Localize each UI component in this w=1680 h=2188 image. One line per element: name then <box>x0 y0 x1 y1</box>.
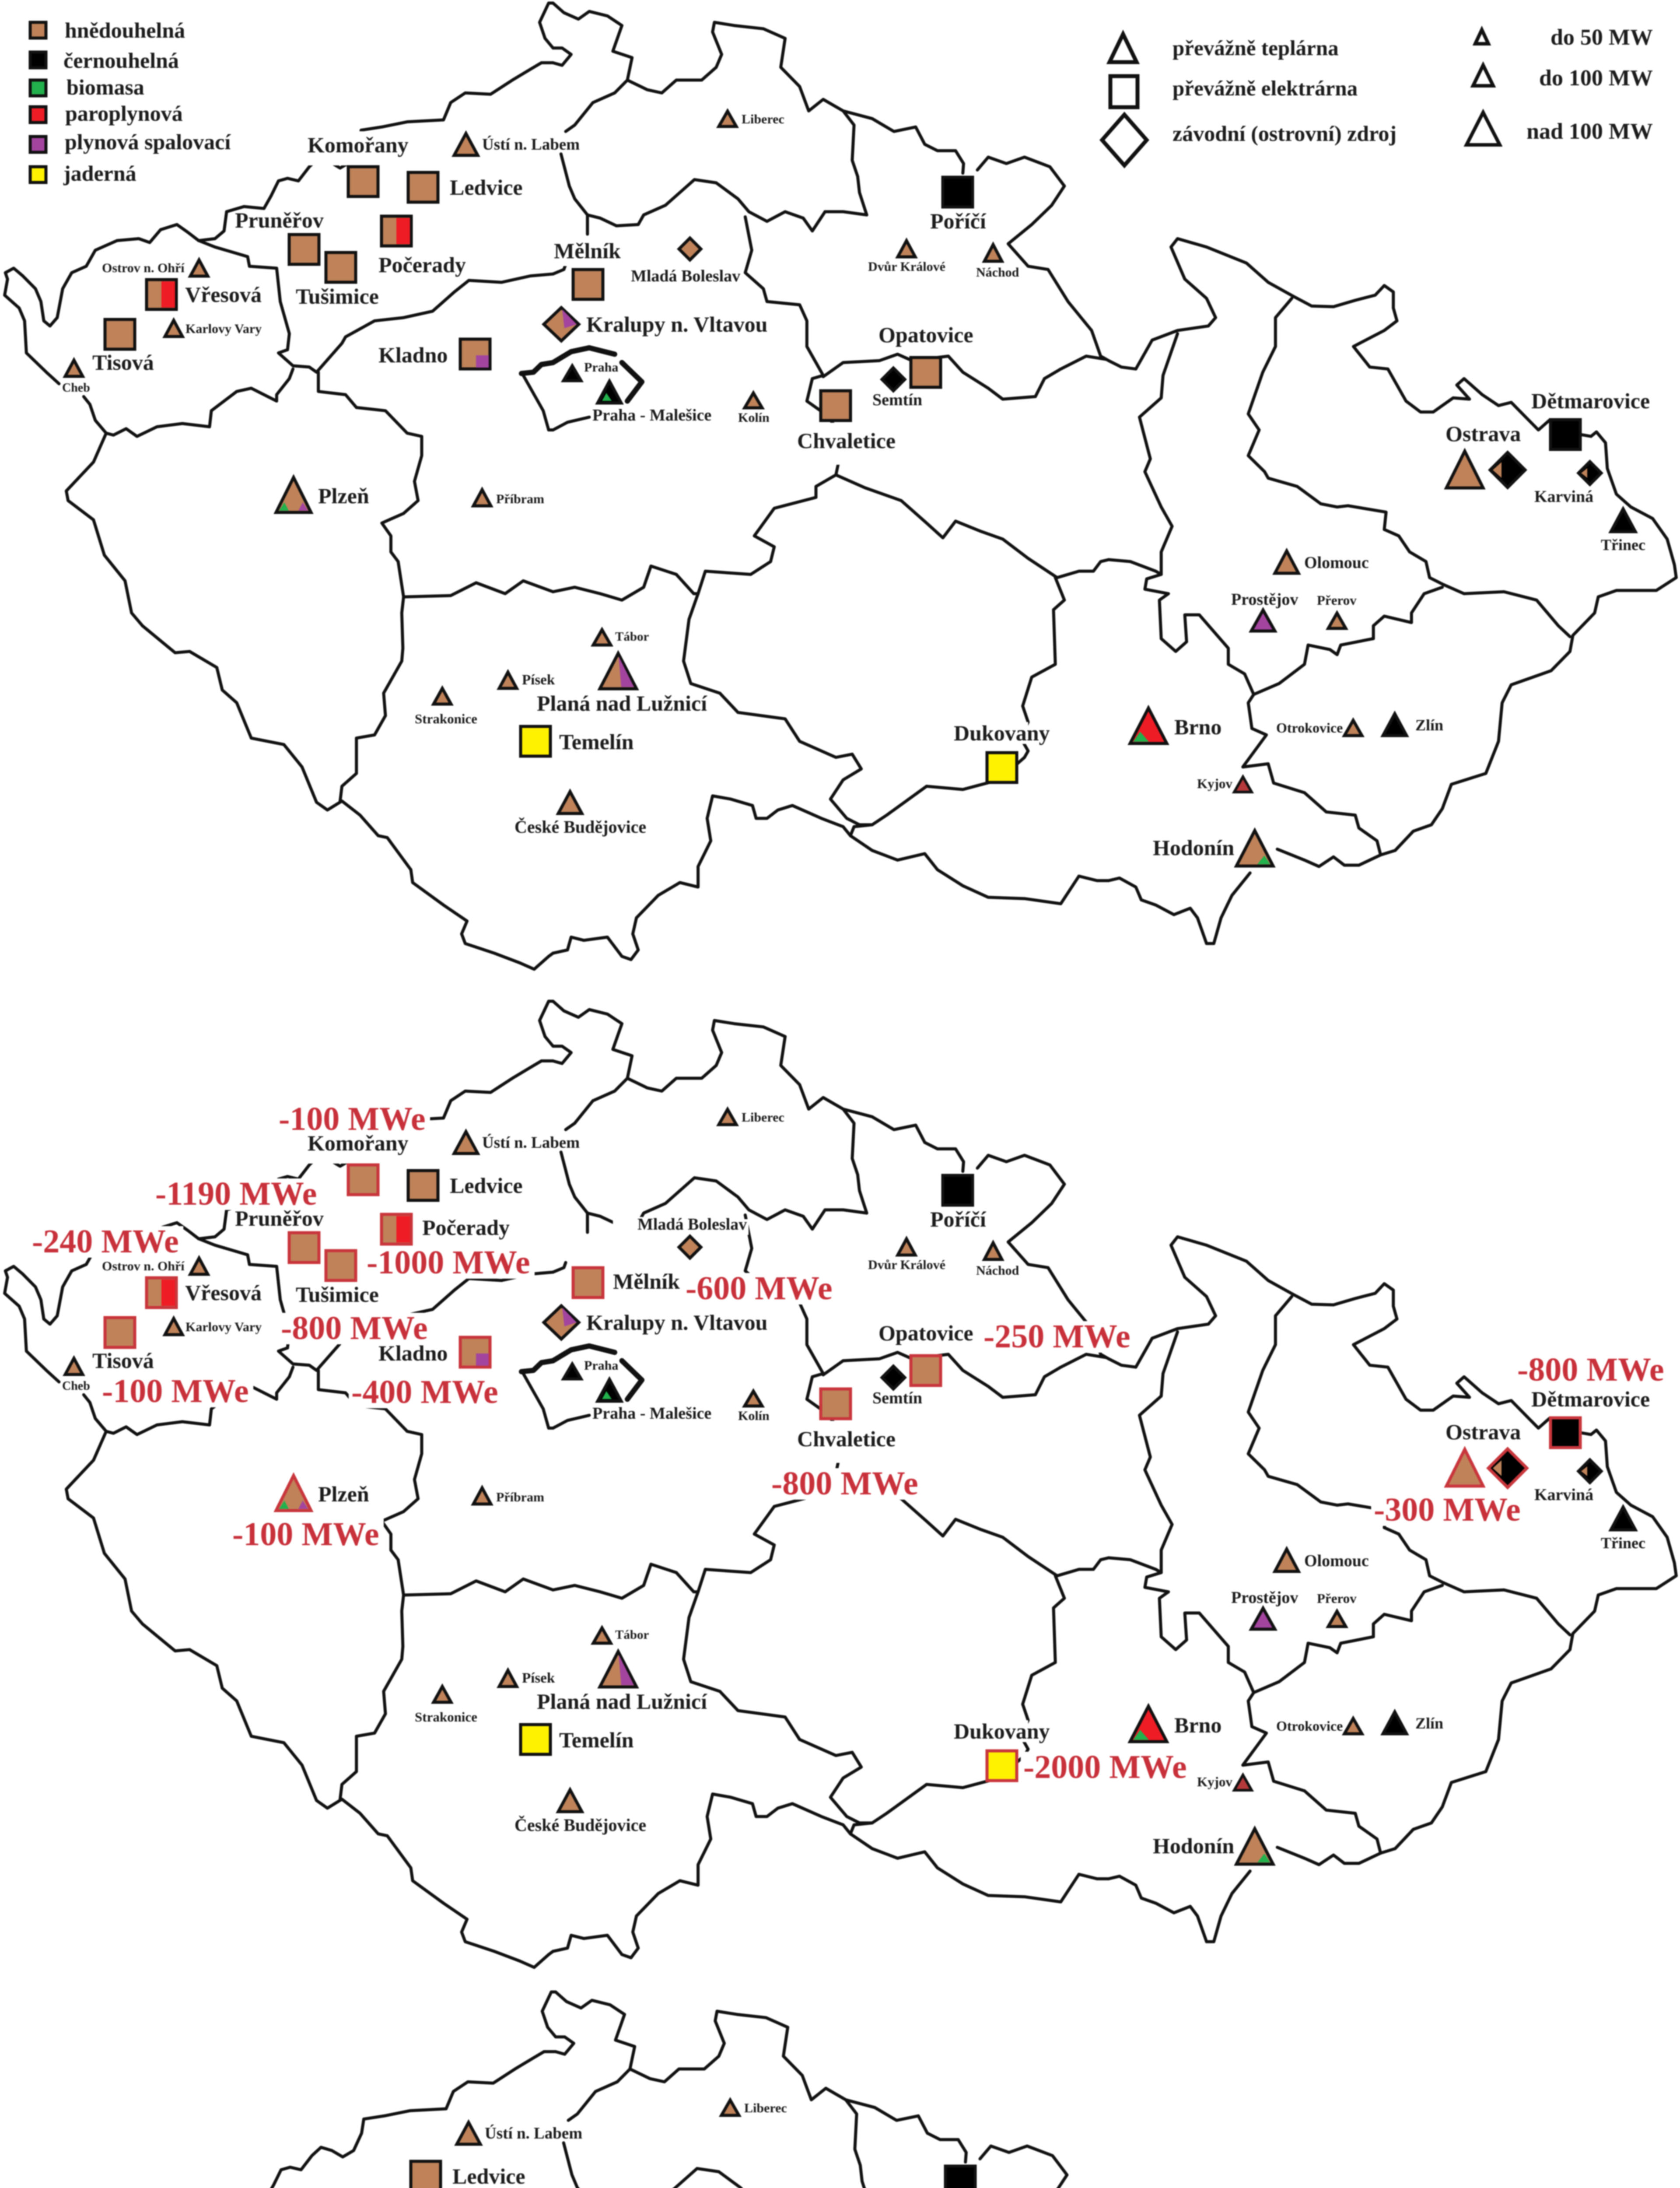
plant: Prostějov <box>1231 590 1298 631</box>
plant: Semtín <box>872 368 922 409</box>
plant: Ledvice: Ledvice <box>452 2164 525 2188</box>
plant: Mladá Boleslav: Mladá Boleslav <box>637 1215 747 1234</box>
plant: Třinec: Třinec <box>1601 536 1645 554</box>
plant: Chvaletice <box>797 391 896 453</box>
plant: Praha <box>564 360 618 381</box>
plant: Písek <box>499 1670 555 1687</box>
plant: Dukovany: Dukovany <box>954 721 1050 745</box>
plant: Dvůr Králové <box>868 241 945 274</box>
plant: Plzeň <box>276 477 369 512</box>
plant: Ledvice <box>408 172 523 202</box>
plant: Ledvice <box>408 1171 523 1200</box>
plant: Opatovice with reduction <box>878 1318 1130 1385</box>
plant: Třinec: Třinec <box>1601 1534 1645 1552</box>
plant: Příbram: Příbram <box>496 492 544 506</box>
plant: Strakonice: Strakonice <box>415 1709 477 1725</box>
plant: České Budějovice <box>514 1790 646 1835</box>
plant: Hodonín <box>1153 831 1273 866</box>
legend: fuel types: černouhelná <box>63 48 179 73</box>
plant: Pruněřov: Pruněřov <box>235 208 324 232</box>
plant: Komořany with reduction: Komořany <box>308 1131 409 1155</box>
plant: Praha - Malešice <box>592 1379 711 1423</box>
plant: Plzeň with reduction: Plzeň <box>318 1482 369 1506</box>
plant: České Budějovice: České Budějovice <box>514 817 646 837</box>
plant: Kladno <box>378 339 490 369</box>
plant: Vřesová with reduction: -240 MWe <box>32 1223 179 1260</box>
plant: Dětmarovice <box>1531 389 1650 449</box>
plant: Příbram: Příbram <box>496 1490 544 1504</box>
plant: Náchod: Náchod <box>976 265 1019 280</box>
plant: Opatovice <box>878 323 973 387</box>
plant: Cheb <box>62 1358 90 1393</box>
legend: fuel types: biomasa <box>66 75 144 99</box>
plant: Chvaletice with reduction <box>771 1389 918 1502</box>
plant: Kralupy n. Vltavou <box>544 308 767 341</box>
plant: Kolín: Kolín <box>738 410 770 425</box>
plant: Příbram <box>473 490 544 506</box>
plant: Dvůr Králové <box>868 1239 945 1272</box>
plant: Praha: Praha <box>584 360 618 375</box>
map outline: regions of Czechia <box>5 3 1676 969</box>
plant: Temelín: Temelín <box>559 729 634 754</box>
plant: Zlín: Zlín <box>1415 716 1443 734</box>
plant: Tušimice: Tušimice <box>296 284 379 309</box>
plant: Kladno with reduction: Kladno <box>378 1341 448 1365</box>
plant: Praha - Malešice: Praha - Malešice <box>592 1404 711 1423</box>
plant: Otrokovice: Otrokovice <box>1276 1718 1343 1734</box>
plant: Temelín <box>521 726 634 756</box>
plant: Ústí n. Labem: Ústí n. Labem <box>482 135 580 154</box>
legend: fuel types: jaderná <box>63 161 136 186</box>
plant: České Budějovice <box>514 792 646 837</box>
plant: Tušimice with reduction: -800 MWe <box>281 1310 428 1346</box>
plant: Ústí n. Labem: Ústí n. Labem <box>485 2124 582 2142</box>
plant: Náchod <box>976 245 1019 280</box>
legend: plant types: převážně teplárna <box>1172 36 1339 60</box>
plant: Liberec <box>719 1109 784 1125</box>
plant: Pruněřov with reduction <box>155 1175 324 1262</box>
plant: Praha <box>564 1358 618 1379</box>
legend: plant types <box>1102 34 1396 165</box>
plant: Olomouc: Olomouc <box>1304 1552 1369 1570</box>
plant: Karviná <box>1534 1460 1601 1504</box>
plant: Ledvice: Ledvice <box>450 1173 523 1198</box>
plant: Dvůr Králové: Dvůr Králové <box>868 1258 945 1272</box>
plant: Ústí n. Labem: Ústí n. Labem <box>482 1133 580 1152</box>
plant: Plzeň: Plzeň <box>318 484 369 508</box>
plant: Dukovany with reduction <box>954 1719 1187 1785</box>
plant: Tisová with reduction: Tisová <box>92 1348 154 1373</box>
plant: Mělník with reduction: -600 MWe <box>686 1270 833 1307</box>
plant: Liberec: Liberec <box>742 112 784 126</box>
plant: Tušimice <box>296 252 379 309</box>
plant: Brno: Brno <box>1174 715 1222 739</box>
plant: Dětmarovice: Dětmarovice <box>1531 389 1650 413</box>
plant: Brno: Brno <box>1174 1713 1222 1737</box>
plant: Opatovice: Opatovice <box>878 323 973 347</box>
plant: Poříčí: Poříčí <box>930 1207 987 1231</box>
plant: Planá nad Lužnicí <box>537 653 707 715</box>
plant: Kralupy n. Vltavou: Kralupy n. Vltavou <box>586 1310 767 1335</box>
plant: Prostějov <box>1231 1588 1298 1629</box>
plant: Písek <box>499 672 555 688</box>
plant: Mladá Boleslav <box>631 238 740 285</box>
plant: Tábor: Tábor <box>615 1628 649 1642</box>
plant: Tábor: Tábor <box>615 630 649 644</box>
plant: Olomouc: Olomouc <box>1304 554 1369 572</box>
plant: Semtín: Semtín <box>872 1389 922 1407</box>
legend: fuel types <box>30 18 231 186</box>
plant: Třinec <box>1601 509 1645 554</box>
plant: Tábor <box>593 1628 649 1643</box>
plant: Liberec: Liberec <box>742 1110 784 1125</box>
plant: Tušimice with reduction: Tušimice <box>296 1282 379 1307</box>
plant: Ústí n. Labem <box>454 1132 580 1154</box>
plant: Pruněřov <box>235 208 324 264</box>
plant: Praha - Malešice: Praha - Malešice <box>592 406 711 424</box>
plant: Plzeň with reduction <box>232 1476 379 1553</box>
plant: Ledvice <box>411 2161 525 2188</box>
plant: Olomouc <box>1275 551 1369 573</box>
masks behind labels <box>29 1104 1669 1783</box>
plant: Poříčí <box>933 2166 989 2188</box>
plant: Chvaletice with reduction: -800 MWe <box>771 1465 918 1502</box>
plant: Ostrava with reduction: -300 MWe <box>1374 1491 1521 1528</box>
plant: Prostějov: Prostějov <box>1231 590 1298 609</box>
plant: Dětmarovice with reduction: Dětmarovice <box>1531 1387 1650 1411</box>
plant: Přerov <box>1317 1591 1357 1627</box>
legend: capacity sizes: do 50 MW <box>1550 25 1653 50</box>
plant: Chvaletice with reduction: Chvaletice <box>797 1427 896 1451</box>
map outline: regions of Czechia <box>5 1001 1676 1967</box>
plant: Mladá Boleslav: Mladá Boleslav <box>631 267 740 285</box>
plant: Ostrava with reduction <box>1374 1420 1527 1528</box>
plant: Písek: Písek <box>522 672 555 688</box>
plant: Zlín <box>1383 1712 1443 1734</box>
plant: Hodonín <box>1153 1829 1273 1864</box>
plant: Semtín: Semtín <box>872 391 922 409</box>
plant: Mělník with reduction: Mělník <box>613 1269 680 1294</box>
plant: Ostrava: Ostrava <box>1446 421 1521 446</box>
plant: Ostrov n. Ohří <box>102 260 208 276</box>
plant: Liberec <box>721 2100 787 2115</box>
plant: Komořany with reduction: -100 MWe <box>279 1101 426 1137</box>
plant: Semtín <box>872 1366 922 1407</box>
plant: Brno <box>1130 708 1222 743</box>
plant: Kolín: Kolín <box>738 1409 770 1423</box>
plant: Přerov: Přerov <box>1317 1591 1357 1606</box>
plant: Strakonice <box>415 688 477 726</box>
plant: Poříčí <box>930 177 987 233</box>
legend: fuel types: plynová spalovací <box>65 130 231 154</box>
plant: Ostrov n. Ohří <box>102 1258 208 1274</box>
plant: Karviná: Karviná <box>1534 1486 1593 1504</box>
plant: Kladno: Kladno <box>378 343 448 367</box>
plant: Dukovany <box>954 721 1050 782</box>
plant: Karviná: Karviná <box>1534 487 1593 506</box>
plant: Kladno with reduction: -400 MWe <box>351 1374 498 1410</box>
plant: Liberec: Liberec <box>744 2101 787 2115</box>
plant: Poříčí: Poříčí <box>930 209 987 233</box>
masks behind labels <box>306 131 1028 744</box>
plant: Pruněřov with reduction: -1190 MWe <box>155 1175 317 1212</box>
legend: capacity sizes <box>1466 25 1653 145</box>
plant: Karlovy Vary: Karlovy Vary <box>186 322 262 336</box>
legend: capacity sizes: do 100 MW <box>1539 66 1653 91</box>
plant: Kyjov <box>1197 776 1252 792</box>
plant: Příbram <box>473 1488 544 1504</box>
plant: Mělník with reduction <box>573 1268 833 1307</box>
legend: plant types: převážně elektrárna <box>1172 76 1358 100</box>
plant: Cheb <box>62 360 90 395</box>
plant: Dětmarovice with reduction <box>1517 1351 1664 1448</box>
plant: Počerady with reduction: Počerady <box>422 1215 510 1240</box>
plant: Ostrov n. Ohří: Ostrov n. Ohří <box>102 1259 185 1273</box>
plant: Přerov <box>1317 593 1357 628</box>
plant: Kladno with reduction <box>351 1337 498 1410</box>
plant: České Budějovice: České Budějovice <box>514 1815 646 1835</box>
plant: Počerady <box>378 216 466 277</box>
plant: Vřesová <box>147 280 262 309</box>
plant: Chvaletice: Chvaletice <box>797 428 896 453</box>
legend: fuel types: paroplynová <box>65 101 183 126</box>
plant: Dukovany with reduction: -2000 MWe <box>1023 1749 1187 1785</box>
plant: Tábor <box>593 630 649 645</box>
plant: Planá nad Lužnicí <box>537 1652 707 1714</box>
plant: Kyjov: Kyjov <box>1197 776 1232 791</box>
plant: Strakonice <box>415 1687 477 1725</box>
plant: Olomouc <box>1275 1549 1369 1571</box>
plant: Náchod: Náchod <box>976 1263 1019 1278</box>
plant: Opatovice with reduction: Opatovice <box>878 1321 973 1345</box>
plant: Tisová with reduction: -100 MWe <box>102 1373 249 1410</box>
plant: Hodonín: Hodonín <box>1153 1834 1234 1858</box>
plant: Zlín: Zlín <box>1415 1715 1443 1732</box>
panel: map of remaining power plants <box>7 1992 1679 2188</box>
plant: Kralupy n. Vltavou: Kralupy n. Vltavou <box>586 312 767 337</box>
plant: Liberec <box>719 111 784 126</box>
plant: Cheb: Cheb <box>62 381 90 395</box>
panel: map of planned capacity reductions <box>5 1001 1676 1967</box>
plant: Písek: Písek <box>522 1670 555 1686</box>
plant: Třinec <box>1601 1507 1645 1552</box>
plant: Mělník: Mělník <box>554 238 621 263</box>
plant: Přerov: Přerov <box>1317 593 1357 608</box>
plant: Ústí n. Labem <box>457 2122 582 2144</box>
plant: Tušimice with reduction <box>281 1251 428 1346</box>
plant: Strakonice: Strakonice <box>415 711 477 726</box>
plant: Prostějov: Prostějov <box>1231 1588 1298 1607</box>
legend: capacity sizes: nad 100 MW <box>1526 119 1653 144</box>
plant: Ostrava with reduction: Ostrava <box>1446 1420 1521 1444</box>
plant: Vřesová: Vřesová <box>185 282 262 307</box>
plant: Hodonín: Hodonín <box>1153 835 1234 860</box>
plant: Dětmarovice with reduction: -800 MWe <box>1517 1351 1664 1388</box>
plant: Mladá Boleslav <box>637 1215 747 1258</box>
plant: Praha: Praha <box>584 1358 618 1373</box>
plant: Temelín: Temelín <box>559 1728 634 1752</box>
plant: Tisová with reduction <box>92 1318 249 1410</box>
plant: Komořany <box>308 133 409 196</box>
plant: Komořany: Komořany <box>308 133 409 157</box>
plant: Kolín <box>738 1391 770 1423</box>
plant: Ostrov n. Ohří: Ostrov n. Ohří <box>102 261 185 275</box>
plant: Poříčí <box>930 1175 987 1231</box>
plant: Kyjov: Kyjov <box>1197 1774 1232 1789</box>
legend: fuel types: hnědouhelná <box>65 18 185 42</box>
plant: Komořany with reduction <box>279 1101 426 1195</box>
panel: map of current power plants <box>5 3 1676 969</box>
plant: Praha - Malešice <box>592 381 711 424</box>
plant: Počerady with reduction <box>367 1214 530 1281</box>
plant: Zlín <box>1383 714 1443 736</box>
map outline: regions of Czechia <box>7 1992 1679 2188</box>
plant: Kralupy n. Vltavou <box>544 1306 767 1339</box>
plant: Planá nad Lužnicí: Planá nad Lužnicí <box>537 691 707 715</box>
plant: Tisová: Tisová <box>92 350 154 375</box>
plant: Kyjov <box>1197 1774 1252 1790</box>
plant: Cheb: Cheb <box>62 1379 90 1393</box>
plant: Mělník <box>554 238 621 299</box>
plant: Náchod <box>976 1243 1019 1278</box>
plant: Kolín <box>738 393 770 425</box>
plant: Ledvice: Ledvice <box>450 175 523 200</box>
plant: Temelín <box>521 1725 634 1754</box>
plant: Ostrava <box>1446 421 1525 488</box>
plant: Tisová <box>92 319 154 375</box>
plant: Ústí n. Labem <box>454 133 580 155</box>
legend: plant types: závodní (ostrovní) zdroj <box>1172 121 1396 146</box>
plant: Karlovy Vary: Karlovy Vary <box>186 1320 262 1334</box>
plant: Počerady: Počerady <box>378 252 466 277</box>
plant: Pruněřov with reduction: Pruněřov <box>235 1206 324 1231</box>
plant: Vřesová with reduction <box>32 1223 262 1308</box>
plant: Planá nad Lužnicí: Planá nad Lužnicí <box>537 1689 707 1714</box>
plant: Karviná <box>1534 462 1601 506</box>
plant: Opatovice with reduction: -250 MWe <box>984 1318 1130 1355</box>
plant: Vřesová with reduction: Vřesová <box>185 1280 262 1305</box>
plant: Brno <box>1130 1706 1222 1742</box>
plant: Počerady with reduction: -1000 MWe <box>367 1244 530 1281</box>
plant: Dukovany with reduction: Dukovany <box>954 1719 1050 1743</box>
plant: Plzeň with reduction: -100 MWe <box>232 1516 379 1553</box>
plant: Otrokovice: Otrokovice <box>1276 720 1343 736</box>
plant: Dvůr Králové: Dvůr Králové <box>868 259 945 274</box>
